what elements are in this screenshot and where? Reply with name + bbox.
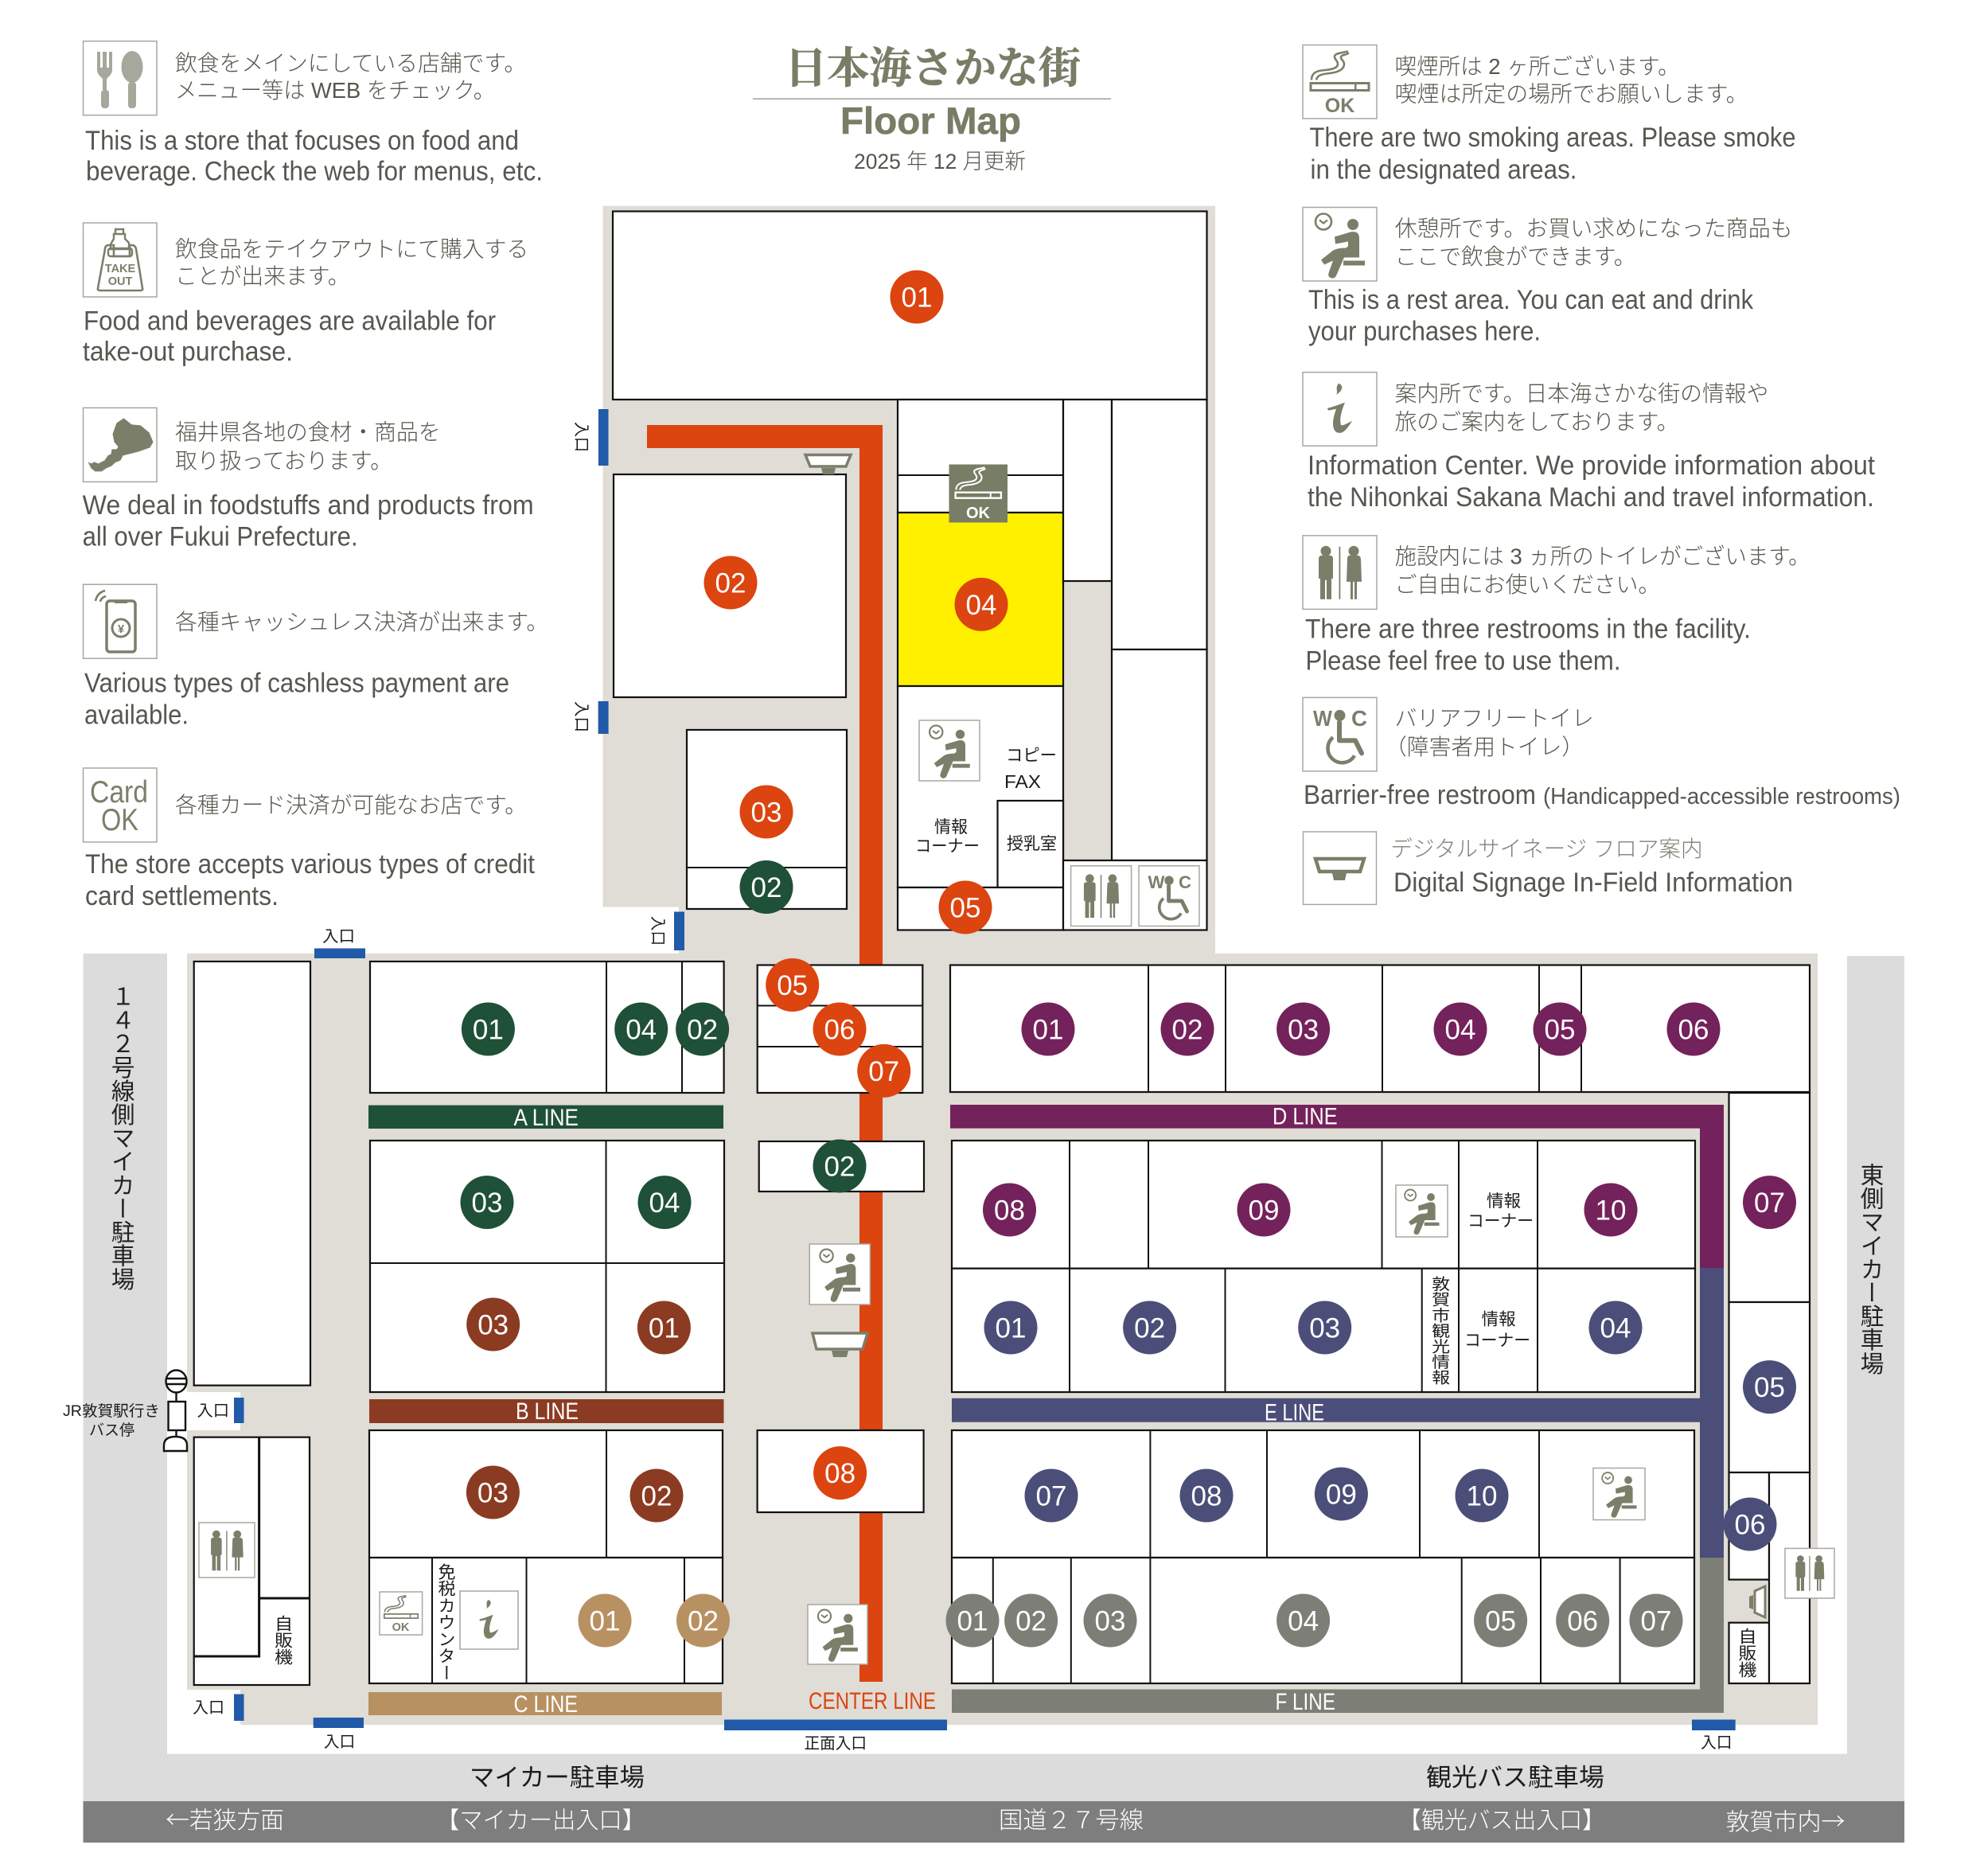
shop markers: E line bbox=[984, 1301, 1796, 1550]
English description: This is a rest area. You can eat and drink bbox=[1308, 285, 1754, 315]
marker: D 08 bbox=[983, 1183, 1036, 1237]
shop blocks: center island bbox=[758, 965, 924, 1512]
icon: Fukui prefecture map bbox=[83, 408, 157, 482]
icon: wheelchair WC bbox=[1303, 697, 1377, 771]
marker: D 04 bbox=[1434, 1003, 1487, 1055]
room labels: 免税カウンター bbox=[436, 1563, 456, 1681]
shop markers: A line bbox=[460, 860, 866, 1229]
English description bbox=[83, 306, 496, 367]
shop blocks: east side bbox=[950, 965, 1810, 1683]
English description: the Nihonkai Sakana Machi and travel information. bbox=[1308, 482, 1874, 513]
icon: smoking area on map bbox=[949, 465, 1008, 522]
icon: rest area E block bbox=[1593, 1468, 1645, 1520]
marker: E 01 bbox=[984, 1301, 1038, 1355]
marker: center 03: 03 bbox=[751, 798, 781, 828]
Japanese description: ここで飲食ができます。 bbox=[1395, 244, 1636, 269]
marker: F 06 bbox=[1556, 1593, 1609, 1648]
label: route 142 side parking: １４２号線側マイカー駐車場 bbox=[107, 985, 134, 1291]
marker: center 07 bbox=[857, 1044, 910, 1098]
legend: cashless payment bbox=[83, 584, 548, 731]
marker: center 02: 02 bbox=[715, 568, 746, 599]
icon: information bbox=[1303, 372, 1377, 446]
icon: Card OK: OK bbox=[101, 803, 138, 837]
title bbox=[785, 45, 1081, 174]
Japanese description bbox=[1395, 216, 1793, 269]
marker: center 04 bbox=[955, 578, 1008, 631]
marker: E 05: 05 bbox=[1754, 1372, 1785, 1403]
center line route bbox=[647, 425, 883, 1682]
marker: D 08: 08 bbox=[994, 1195, 1025, 1226]
English description bbox=[85, 126, 543, 186]
English description: Food and beverages are available for bbox=[84, 306, 496, 337]
line bar: C LINE: C LINE bbox=[514, 1691, 578, 1718]
icon: Card OK bbox=[83, 768, 157, 842]
icon: rest area center 1 bbox=[809, 1244, 870, 1305]
icon: signage east bbox=[1749, 1586, 1765, 1617]
marker: A 02 north: 02 bbox=[751, 872, 781, 903]
English description: beverage. Check the web for menus, etc. bbox=[86, 156, 543, 186]
icon: restroom west bbox=[199, 1523, 255, 1578]
English description: We deal in foodstuffs and products from bbox=[83, 490, 534, 521]
Japanese description: 各種キャッシュレス決済が出来ます。 bbox=[175, 610, 548, 634]
marker: E 01: 01 bbox=[996, 1313, 1026, 1344]
English description: This is a store that focuses on food and bbox=[85, 126, 519, 156]
English description bbox=[83, 490, 534, 552]
label: CENTER LINE: CENTER LINE bbox=[809, 1688, 936, 1714]
English description bbox=[1310, 123, 1795, 185]
marker: E 08: 08 bbox=[1191, 1480, 1222, 1512]
marker: A 03: 03 bbox=[472, 1188, 502, 1219]
icon: barrier-free north: C bbox=[1179, 872, 1191, 892]
entrance labels: 正面入口 bbox=[804, 1735, 867, 1753]
English description: all over Fukui Prefecture. bbox=[83, 522, 358, 552]
marker: D 03: 03 bbox=[1288, 1014, 1319, 1046]
marker: D 06 bbox=[1666, 1003, 1721, 1055]
marker: D 02 bbox=[1160, 1003, 1214, 1055]
English description: Information Center. We provide information about bbox=[1308, 450, 1876, 481]
marker: F 05 bbox=[1474, 1593, 1527, 1648]
marker: F 02 bbox=[1004, 1593, 1058, 1648]
shop markers: C line bbox=[578, 1593, 730, 1648]
shop markers: F line bbox=[945, 1593, 1682, 1648]
marker: C 01: 01 bbox=[590, 1606, 620, 1636]
marker: center 06 bbox=[813, 1003, 866, 1055]
Japanese description: 取り扱っております。 bbox=[175, 449, 392, 473]
entrance labels: 入口 bbox=[572, 701, 590, 732]
label: to Wakasa: ←若狭方面 bbox=[166, 1802, 284, 1835]
label: to Tsuruga city: 敦賀市内→ bbox=[1725, 1804, 1845, 1837]
marker: E 09: 09 bbox=[1326, 1479, 1357, 1511]
marker: E 03: 03 bbox=[1309, 1313, 1340, 1344]
road bar bbox=[83, 1801, 1904, 1843]
Japanese description: デジタルサイネージ フロア案内 bbox=[1391, 837, 1703, 861]
Japanese description: 飲食品をテイクアウトにて購入する bbox=[175, 237, 528, 261]
marker: F 03: 03 bbox=[1095, 1606, 1125, 1636]
legend: take-out bbox=[83, 223, 528, 367]
icon: take-out bag bbox=[83, 223, 157, 297]
marker: center 02 bbox=[704, 556, 758, 610]
marker: D 07 bbox=[1743, 1176, 1796, 1229]
marker: A 01: 01 bbox=[473, 1014, 504, 1046]
legend: smoking areas bbox=[1303, 45, 1795, 185]
line bar: B LINE bbox=[369, 1398, 724, 1425]
Japanese description bbox=[1395, 381, 1768, 435]
marker: center 05 bbox=[939, 880, 992, 934]
icon: wheelchair WC: C bbox=[1351, 706, 1367, 731]
Japanese description: 喫煙は所定の場所でお願いします。 bbox=[1395, 81, 1748, 107]
entrance labels: 入口 bbox=[572, 422, 590, 452]
marker: B 01 bbox=[637, 1301, 691, 1355]
Japanese description bbox=[175, 420, 441, 473]
legend: information center bbox=[1303, 372, 1876, 513]
marker: E 04: 04 bbox=[1600, 1313, 1631, 1344]
marker: B 02 bbox=[630, 1469, 683, 1522]
entrance labels: 入口 bbox=[193, 1699, 224, 1717]
marker: A 03 bbox=[460, 1176, 514, 1229]
marker: B 03 lower bbox=[466, 1466, 520, 1519]
room labels: 情報 bbox=[1482, 1310, 1516, 1329]
label: east side parking: 東側マイカー駐車場 bbox=[1857, 1163, 1884, 1375]
marker: A 04 top: 04 bbox=[626, 1014, 657, 1046]
marker: E 06: 06 bbox=[1735, 1509, 1765, 1541]
bus stop label bbox=[63, 1402, 160, 1439]
room labels: 情報 bbox=[1487, 1192, 1521, 1211]
label: route 27: 国道２７号線 bbox=[999, 1802, 1144, 1835]
marker: A 04: 04 bbox=[649, 1188, 680, 1219]
icon: wheelchair WC: W bbox=[1313, 706, 1333, 731]
marker: F 03 bbox=[1084, 1593, 1136, 1648]
marker: F 02: 02 bbox=[1015, 1606, 1047, 1636]
icon: barrier-free north bbox=[1139, 866, 1199, 926]
shop markers: center line bbox=[704, 271, 1008, 1500]
marker: D 01 bbox=[1022, 1003, 1074, 1055]
marker: F 04 bbox=[1276, 1593, 1330, 1648]
Japanese description: バリアフリートイレ bbox=[1395, 706, 1594, 731]
marker: F 06: 06 bbox=[1567, 1606, 1598, 1636]
marker: B 03 upper bbox=[466, 1297, 520, 1351]
icon: smoking OK: OK bbox=[1325, 95, 1354, 117]
line bar: F LINE: F LINE bbox=[1275, 1689, 1335, 1715]
entrance labels: 入口 bbox=[649, 916, 666, 946]
parking area band bbox=[83, 954, 1904, 1801]
line bar: C LINE bbox=[368, 1691, 722, 1718]
line bar: A LINE: A LINE bbox=[514, 1105, 579, 1131]
legend: Fukui products bbox=[83, 408, 534, 552]
icon: take-out bag: TAKE bbox=[105, 263, 136, 275]
marker: F 07: 07 bbox=[1641, 1606, 1671, 1636]
English description: The store accepts various types of credit bbox=[85, 849, 536, 879]
entrances bbox=[234, 409, 1736, 1730]
Japanese description bbox=[175, 237, 528, 288]
marker: center 01 bbox=[890, 271, 944, 323]
Japanese description: 喫煙所は 2 ヶ所ございます。 bbox=[1395, 54, 1680, 79]
legend: rest area bbox=[1303, 207, 1793, 346]
shop markers: B line bbox=[466, 1297, 691, 1522]
room labels: FAX bbox=[1004, 771, 1041, 792]
marker: D 06: 06 bbox=[1678, 1014, 1709, 1046]
English description bbox=[1308, 285, 1754, 346]
line bar: A LINE bbox=[368, 1105, 723, 1131]
marker: F 05: 05 bbox=[1485, 1606, 1516, 1636]
entrance labels: 入口 bbox=[322, 928, 355, 946]
icon: restroom east bbox=[1785, 1548, 1834, 1598]
shop blocks: north building bbox=[613, 212, 1206, 930]
label: tour bus parking: 観光バス駐車場 bbox=[1426, 1764, 1604, 1792]
icon: Card OK: Card bbox=[90, 775, 148, 809]
marker: D 04: 04 bbox=[1445, 1014, 1475, 1046]
room labels: コーナー bbox=[915, 837, 980, 856]
shop blocks: west side bbox=[194, 961, 724, 1685]
entrance labels: 入口 bbox=[1701, 1734, 1732, 1752]
English description bbox=[1305, 614, 1751, 677]
marker: D 09: 09 bbox=[1249, 1195, 1279, 1226]
English description: Please feel free to use them. bbox=[1305, 646, 1620, 677]
icon: take-out bag: OUT bbox=[108, 275, 132, 288]
room labels: コーナー bbox=[1464, 1332, 1530, 1350]
marker: C 02 bbox=[676, 1593, 730, 1648]
English description bbox=[84, 669, 509, 731]
room labels: 自販機 bbox=[1736, 1628, 1757, 1678]
English description: Various types of cashless payment are bbox=[84, 669, 509, 699]
marker: center 05: 05 bbox=[950, 893, 980, 923]
room labels: 授乳室 bbox=[1007, 835, 1057, 853]
English description: take-out purchase. bbox=[83, 337, 293, 367]
Japanese description bbox=[175, 51, 526, 103]
line bar: D LINE bbox=[950, 1103, 1724, 1268]
Japanese description: 施設内には 3 ヵ所のトイレがございます。 bbox=[1395, 544, 1810, 568]
marker: E 07: 07 bbox=[1036, 1480, 1066, 1512]
bus stop sign bbox=[164, 1371, 187, 1451]
marker: center 03 bbox=[740, 785, 793, 839]
shop markers: D line bbox=[983, 1003, 1796, 1237]
Japanese description: ご自由にお使いください。 bbox=[1395, 572, 1660, 597]
Japanese description: 福井県各地の食材・商品を bbox=[175, 420, 441, 444]
room labels: 情報 bbox=[934, 818, 968, 837]
icon: rest area bbox=[1303, 207, 1377, 281]
Japanese description bbox=[1385, 706, 1594, 759]
marker: D 05: 05 bbox=[1545, 1014, 1575, 1046]
Japanese description: （障害者用トイレ） bbox=[1385, 735, 1584, 759]
marker: D 09 bbox=[1237, 1183, 1291, 1237]
marker: A 04 top bbox=[614, 1003, 668, 1055]
icon: smoking area on map: OK bbox=[966, 505, 991, 522]
marker: F 07 bbox=[1630, 1593, 1682, 1648]
marker: F 04: 04 bbox=[1288, 1606, 1319, 1636]
English description: Digital Signage In-Field Information bbox=[1393, 868, 1793, 898]
icon: smoking C block bbox=[380, 1592, 423, 1635]
icon: smartphone with yen bbox=[83, 584, 157, 658]
Japanese description: メニュー等は WEB をチェック。 bbox=[175, 78, 495, 103]
marker: A 02 center: 02 bbox=[824, 1151, 855, 1183]
marker: E 07 bbox=[1025, 1469, 1078, 1522]
English description bbox=[1304, 780, 1900, 810]
Japanese description: 案内所です。日本海さかな街の情報や bbox=[1395, 381, 1768, 406]
bus stop bbox=[63, 1371, 187, 1451]
marker: A 02 top bbox=[676, 1003, 729, 1055]
marker: E 03 bbox=[1298, 1301, 1351, 1355]
marker: D 07: 07 bbox=[1754, 1188, 1785, 1219]
label: car entrance: 【マイカー出入口】 bbox=[436, 1802, 645, 1835]
English description: in the designated areas. bbox=[1310, 154, 1577, 185]
English description: (Handicapped-accessible restrooms) bbox=[1543, 784, 1900, 809]
icon: signage center bbox=[813, 1333, 867, 1357]
marker: D 10 bbox=[1584, 1183, 1638, 1237]
icon: information C block bbox=[460, 1591, 518, 1649]
marker: E 10: 10 bbox=[1467, 1480, 1497, 1512]
line bar: F LINE bbox=[952, 1558, 1724, 1715]
label: car parking: マイカー駐車場 bbox=[470, 1764, 645, 1792]
marker: D 05 bbox=[1533, 1003, 1587, 1055]
marker: center 07: 07 bbox=[868, 1056, 899, 1087]
marker: A 02 top: 02 bbox=[687, 1014, 718, 1046]
room labels: コピー bbox=[1006, 747, 1057, 765]
icon: restroom north bbox=[1071, 866, 1132, 926]
marker: F 01: 01 bbox=[957, 1606, 988, 1636]
marker: D 10: 10 bbox=[1596, 1195, 1626, 1226]
icon: rest area north bbox=[919, 720, 980, 781]
marker: E 10 bbox=[1455, 1469, 1509, 1522]
bus stop label: JR敦賀駅行き bbox=[63, 1402, 160, 1420]
marker: center 04: 04 bbox=[966, 590, 996, 621]
marker: E 02: 02 bbox=[1134, 1313, 1165, 1344]
marker: E 02 bbox=[1123, 1301, 1176, 1355]
label: bus entrance: 【観光バス出入口】 bbox=[1398, 1802, 1605, 1835]
update date: 2025 年 12 月更新 bbox=[854, 150, 1026, 174]
marker: D 03 bbox=[1276, 1003, 1330, 1055]
Japanese description: 休憩所です。お買い求めになった商品も bbox=[1395, 216, 1793, 240]
marker: B 01: 01 bbox=[649, 1313, 680, 1344]
marker: center 01: 01 bbox=[902, 282, 932, 314]
English description: There are three restrooms in the facility. bbox=[1305, 614, 1751, 645]
entrance labels bbox=[193, 422, 1732, 1753]
line bar: D LINE: D LINE bbox=[1273, 1103, 1338, 1130]
marker: E 06 bbox=[1724, 1498, 1776, 1550]
icon: barrier-free north: W bbox=[1148, 872, 1165, 892]
marker: B 03 upper: 03 bbox=[477, 1310, 509, 1340]
marker: E 08 bbox=[1179, 1469, 1234, 1522]
Japanese description: 旅のご案内をしております。 bbox=[1395, 409, 1679, 435]
legend: food and beverage bbox=[83, 41, 543, 187]
marker: A 02 north bbox=[740, 860, 793, 914]
marker: E 04 bbox=[1588, 1301, 1643, 1355]
Japanese description bbox=[1395, 544, 1810, 597]
room labels: 敦賀市観光情報 bbox=[1429, 1276, 1450, 1386]
marker: C 02: 02 bbox=[688, 1606, 719, 1636]
room labels: コーナー bbox=[1467, 1212, 1534, 1231]
marker: center 08 bbox=[813, 1446, 867, 1500]
icon: smoking C block: OK bbox=[392, 1621, 410, 1634]
entrance labels: 入口 bbox=[324, 1734, 355, 1751]
marker: A 02 center bbox=[813, 1140, 866, 1192]
line bar: B LINE: B LINE bbox=[516, 1398, 579, 1425]
heading: Japanese name: 日本海さかな街 bbox=[785, 45, 1081, 92]
marker: A 01 bbox=[462, 1003, 515, 1055]
marker: D 02: 02 bbox=[1172, 1014, 1202, 1046]
marker: A 04 bbox=[638, 1176, 691, 1229]
legend: card payment bbox=[83, 768, 536, 911]
legend: restrooms bbox=[1303, 536, 1810, 677]
legend: barrier-free restroom bbox=[1303, 697, 1900, 810]
marker: E 09 bbox=[1315, 1468, 1368, 1520]
room labels: 自販機 bbox=[272, 1615, 294, 1665]
Japanese description: 飲食をメインにしている店舗です。 bbox=[175, 51, 526, 76]
English description: There are two smoking areas. Please smoke bbox=[1310, 123, 1795, 153]
marker: center 06: 06 bbox=[824, 1014, 855, 1046]
marker: E 05 bbox=[1743, 1360, 1796, 1414]
marker: C 01 bbox=[578, 1593, 632, 1648]
English description bbox=[85, 849, 536, 911]
marker: center 05 south: 05 bbox=[777, 970, 808, 1001]
floor map bbox=[63, 206, 1834, 1753]
bus stop label: バス停 bbox=[89, 1422, 134, 1439]
English description: available. bbox=[84, 700, 189, 731]
English description bbox=[1308, 450, 1876, 513]
building floor background bbox=[187, 206, 1818, 1725]
Japanese description bbox=[1395, 54, 1748, 107]
Japanese description: ことが出来ます。 bbox=[175, 264, 350, 288]
icon: signage north bbox=[805, 455, 851, 474]
line bar: E LINE bbox=[952, 1268, 1724, 1558]
entrance labels: 入口 bbox=[197, 1402, 229, 1420]
icon: fork and spoon bbox=[83, 41, 157, 115]
marker: B 03 lower: 03 bbox=[477, 1477, 509, 1509]
surroundings: parking and road bbox=[83, 954, 1904, 1843]
marker: D 01: 01 bbox=[1033, 1014, 1063, 1046]
marker: F 01 bbox=[945, 1593, 1000, 1648]
marker: center 08: 08 bbox=[824, 1458, 856, 1489]
icon: smartphone with yen: ¥ bbox=[118, 622, 125, 636]
marker: B 02: 02 bbox=[641, 1480, 672, 1512]
room labels bbox=[272, 747, 1757, 1681]
icon: rest area center 2 bbox=[808, 1605, 867, 1664]
legend: digital signage bbox=[1304, 832, 1793, 904]
icon: smoking OK bbox=[1303, 45, 1377, 119]
marker: center 05 south bbox=[766, 958, 819, 1012]
line bar: E LINE: E LINE bbox=[1265, 1400, 1324, 1426]
icon: digital signage bbox=[1304, 832, 1377, 904]
Japanese description: 各種カード決済が可能なお店です。 bbox=[175, 793, 527, 817]
English description: card settlements. bbox=[85, 881, 279, 911]
icon: rest area D block bbox=[1396, 1185, 1448, 1237]
heading: Floor Map: Floor Map bbox=[840, 99, 1021, 142]
English description: your purchases here. bbox=[1308, 316, 1541, 346]
English description: Barrier-free restroom bbox=[1304, 780, 1536, 810]
icon: restroom bbox=[1303, 536, 1377, 609]
